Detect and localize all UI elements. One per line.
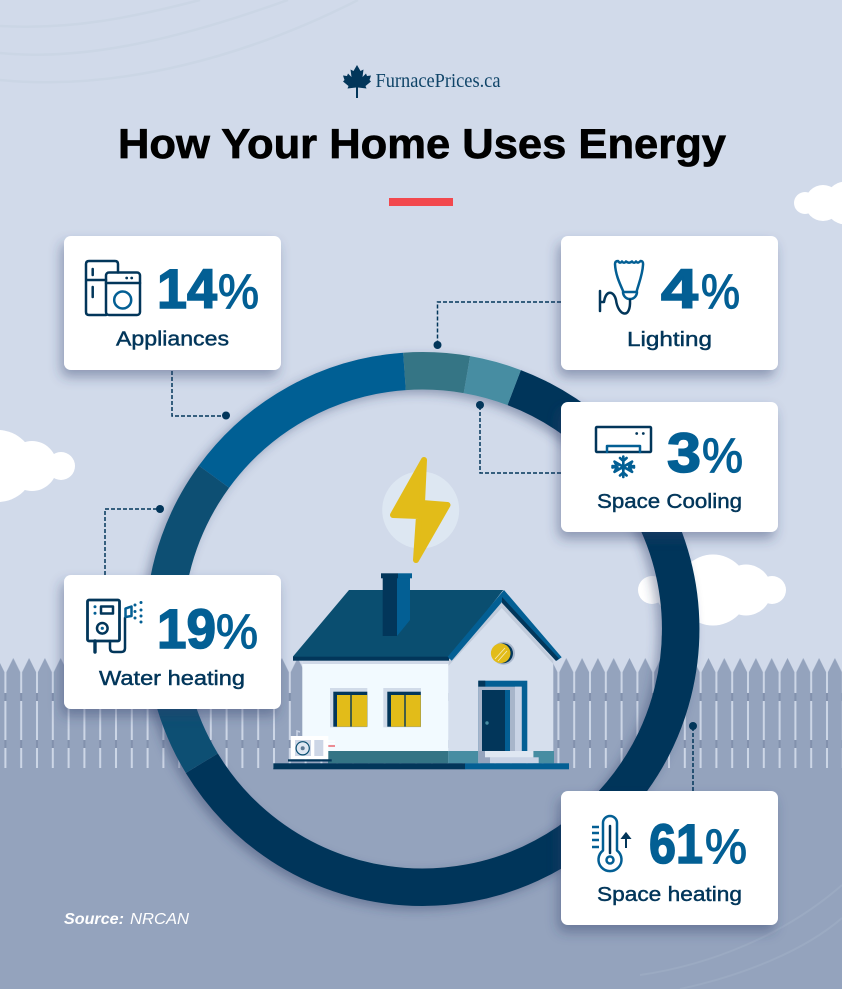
icon: lamp xyxy=(600,261,643,314)
background swirl lines top left xyxy=(0,0,358,82)
logo xyxy=(343,65,501,98)
window right xyxy=(383,688,421,727)
card: appliances xyxy=(64,236,281,370)
house: eave shadow xyxy=(302,660,448,664)
cloud right xyxy=(638,554,786,626)
value: 4%: 4 xyxy=(661,257,698,320)
round gable window xyxy=(491,642,515,665)
value: 14%: 14 xyxy=(157,257,217,320)
door xyxy=(478,681,527,751)
cloud top right xyxy=(794,182,842,224)
ground xyxy=(0,768,842,989)
label: water heating: Water heating xyxy=(99,668,245,690)
roof underside strip xyxy=(293,657,449,661)
source note: NRCAN xyxy=(130,911,189,928)
gable dark inner edge xyxy=(502,597,559,661)
house: main wall xyxy=(302,661,448,751)
value: 14%: % xyxy=(218,266,259,319)
segment: water heating 19% xyxy=(164,477,214,763)
gable blue edge xyxy=(448,590,562,661)
card: lighting xyxy=(561,236,778,370)
value: 61%: 61 xyxy=(649,812,703,875)
icon: water heater xyxy=(88,600,142,652)
title: How Your Home Uses Energy xyxy=(118,120,727,167)
value: 3%: 3 xyxy=(667,421,701,484)
label: space heating: Space heating xyxy=(597,884,742,906)
logo text: FurnacePrices.ca xyxy=(376,70,501,92)
segment: space cooling 3% xyxy=(467,375,514,388)
house walls xyxy=(302,602,553,763)
icon: air conditioner with snowflake xyxy=(596,427,651,477)
house: gable eave shade xyxy=(448,602,553,666)
chimney front xyxy=(383,578,397,636)
segment: appliances 14% xyxy=(214,371,404,477)
value: 19%: % xyxy=(216,606,258,659)
icon: lightning bolt with halo xyxy=(382,460,459,560)
card: space heating xyxy=(561,791,778,925)
picket fence xyxy=(0,658,842,770)
ground slab xyxy=(273,763,569,769)
segment: lighting 4% xyxy=(404,371,467,375)
chimney cap right xyxy=(398,573,412,578)
ground swirl lines xyxy=(640,885,842,989)
value: 19%: 19 xyxy=(157,597,216,660)
value: 3%: % xyxy=(702,430,743,483)
label: lighting: Lighting xyxy=(627,329,712,351)
connector: lighting xyxy=(434,302,561,349)
value: 61%: % xyxy=(705,821,747,874)
connector: water heating xyxy=(105,505,164,575)
chimney cap left xyxy=(381,573,398,578)
foundation xyxy=(328,751,554,763)
red accent bar xyxy=(389,198,453,206)
label: appliances: Appliances xyxy=(116,328,229,350)
cloud left xyxy=(0,430,75,502)
source note: Source: xyxy=(64,911,124,928)
segment: space heating 61% xyxy=(202,388,681,887)
connector: space cooling xyxy=(476,401,561,473)
card: water heating xyxy=(64,575,281,709)
card: space cooling xyxy=(561,402,778,532)
label: space cooling: Space Cooling xyxy=(597,491,742,513)
house: gable wall xyxy=(448,606,553,763)
value: 4%: % xyxy=(701,266,740,319)
connector: space heating xyxy=(689,722,697,791)
icon: thermometer xyxy=(592,816,630,871)
icon: fridge and washer xyxy=(86,261,140,315)
donut chart ring xyxy=(164,371,681,887)
house: roof xyxy=(293,573,562,661)
connector: appliances xyxy=(172,371,230,420)
chimney side xyxy=(397,578,410,636)
window left xyxy=(330,688,367,727)
icon: maple leaf xyxy=(343,65,371,98)
outdoor air conditioning unit xyxy=(288,731,335,762)
